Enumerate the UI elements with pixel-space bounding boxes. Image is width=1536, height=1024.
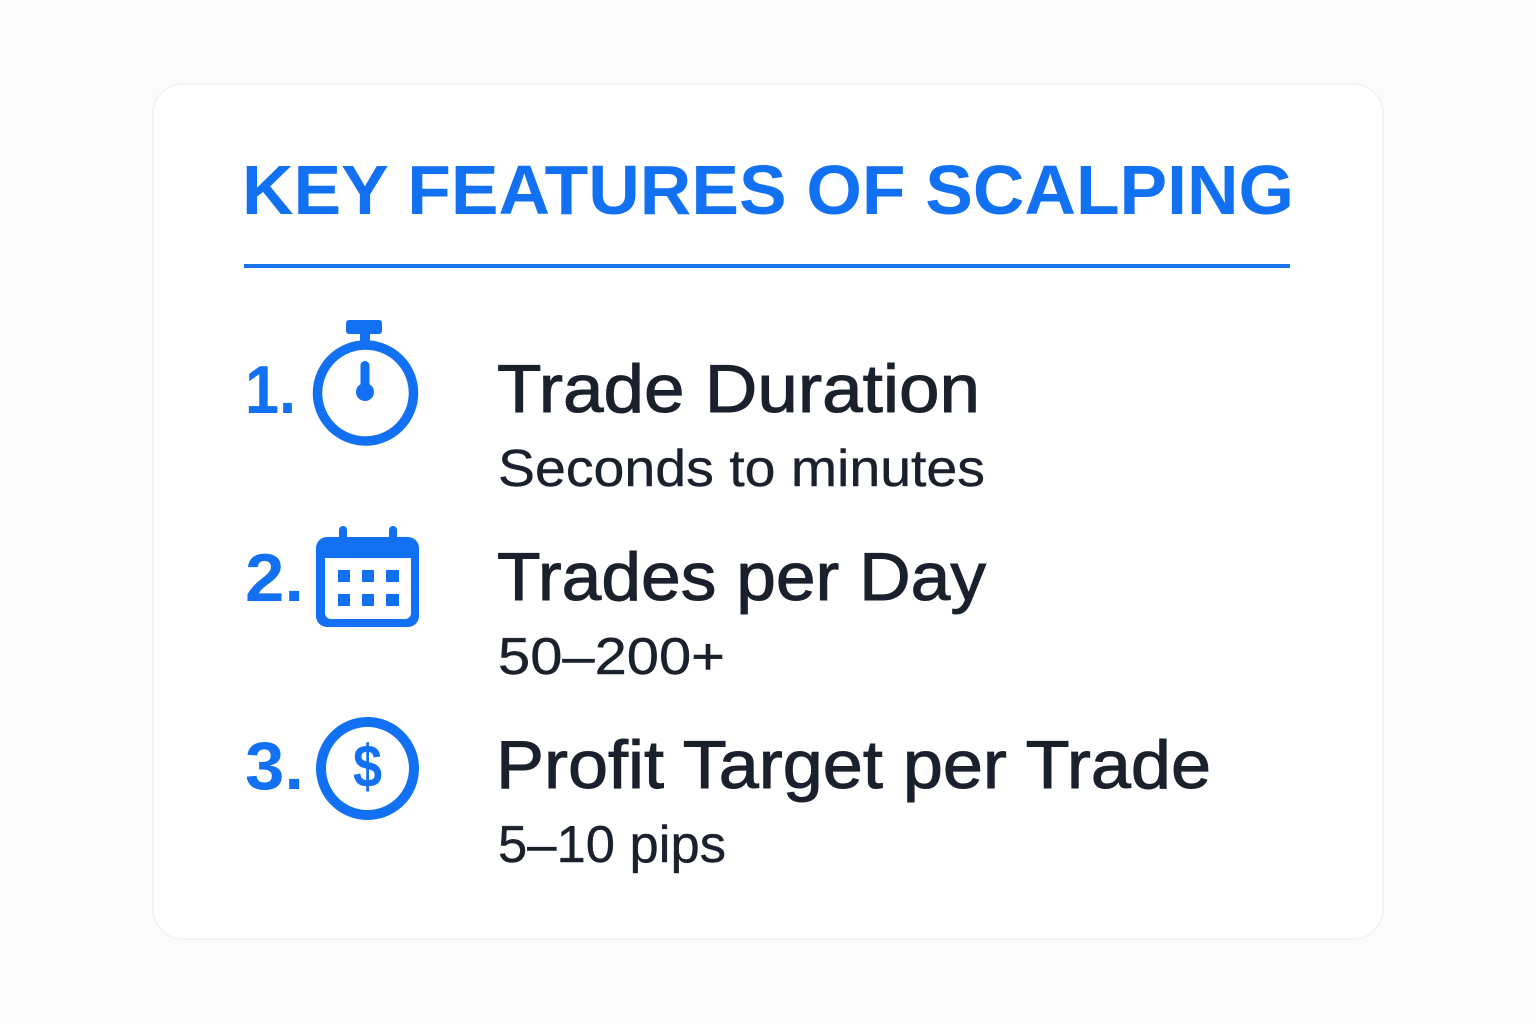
feature 3: profit target per trade [245, 722, 1211, 874]
feature 1: trade duration [245, 320, 985, 498]
icon: dollar coin [321, 722, 414, 815]
title: KEY FEATURES OF SCALPING [242, 151, 1294, 229]
heading: profit target per trade: Profit Target per Trade [496, 727, 1211, 803]
icon: dollar coin: $ [353, 733, 382, 800]
value: 5–10 pips: 5–10 pips [498, 816, 726, 874]
panel: card [153, 84, 1383, 939]
feature 2: trades per day [245, 526, 986, 686]
number 3: 3. [245, 728, 304, 804]
value: seconds to minutes: Seconds to minutes [498, 440, 985, 498]
heading: trades per day: Trades per Day [497, 539, 986, 615]
number 2: 2. [245, 540, 304, 616]
heading: trade duration: Trade Duration [497, 351, 980, 427]
icon: stopwatch [318, 320, 414, 441]
number 1: 1. [245, 352, 296, 428]
icon: calendar [316, 526, 419, 627]
value: 50–200+: 50–200+ [498, 628, 725, 686]
